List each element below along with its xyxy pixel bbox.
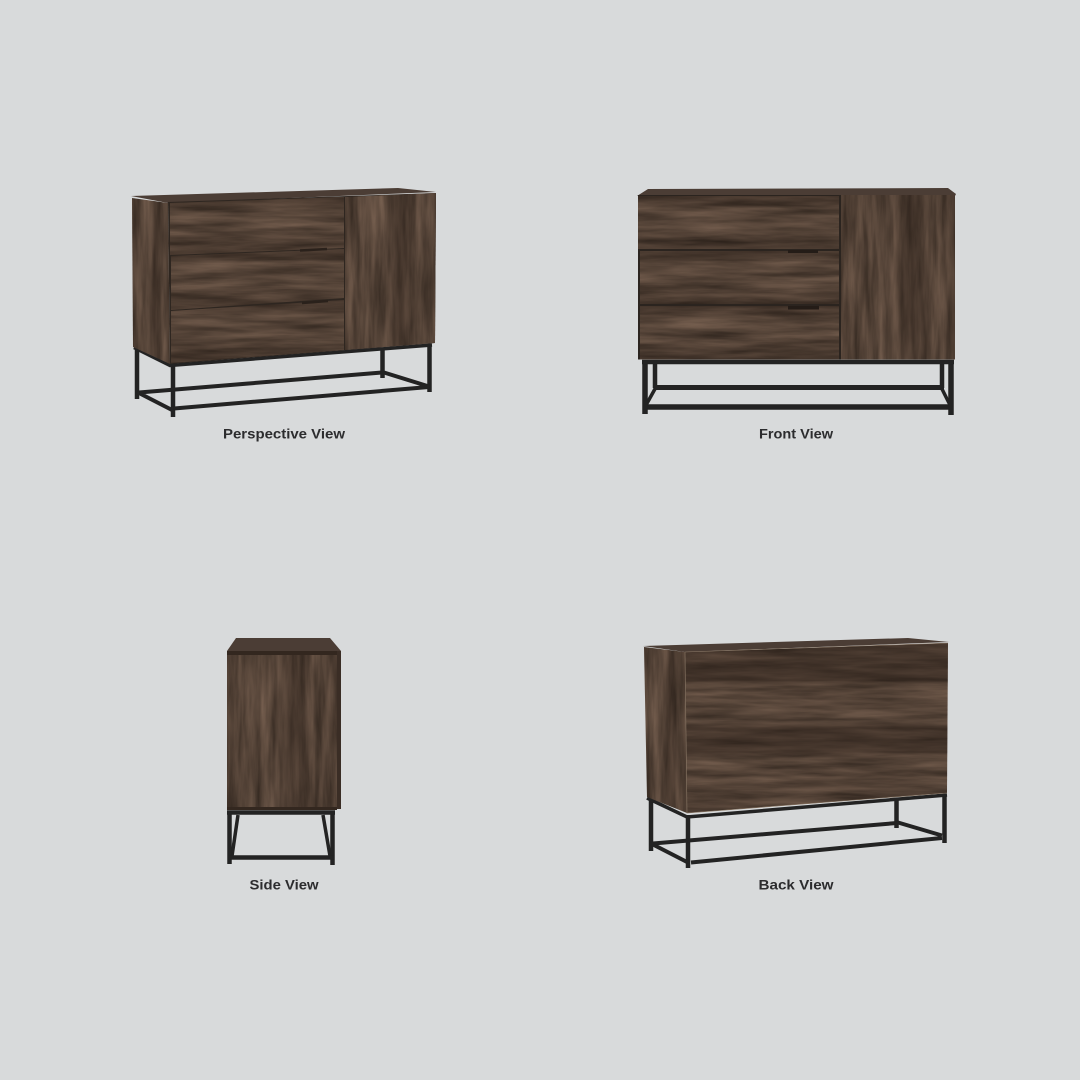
label: back view: Back View [758, 878, 834, 892]
metal frame: perspective [134, 345, 432, 417]
metal frame: front [642, 360, 954, 415]
metal frame: back [647, 795, 947, 868]
label: side view: Side View [250, 878, 319, 892]
label: front view: Front View [759, 426, 834, 442]
metal frame: side [227, 811, 335, 865]
panel: side view [227, 638, 341, 892]
panel: front view [637, 188, 956, 442]
panel: back view [643, 638, 949, 892]
label: perspective view: Perspective View [223, 426, 346, 442]
sideboard body: front [637, 188, 956, 360]
sideboard body: side [227, 638, 341, 810]
sideboard body: back [643, 638, 949, 813]
sideboard body: perspective [131, 188, 436, 364]
panel: perspective view [131, 188, 436, 442]
